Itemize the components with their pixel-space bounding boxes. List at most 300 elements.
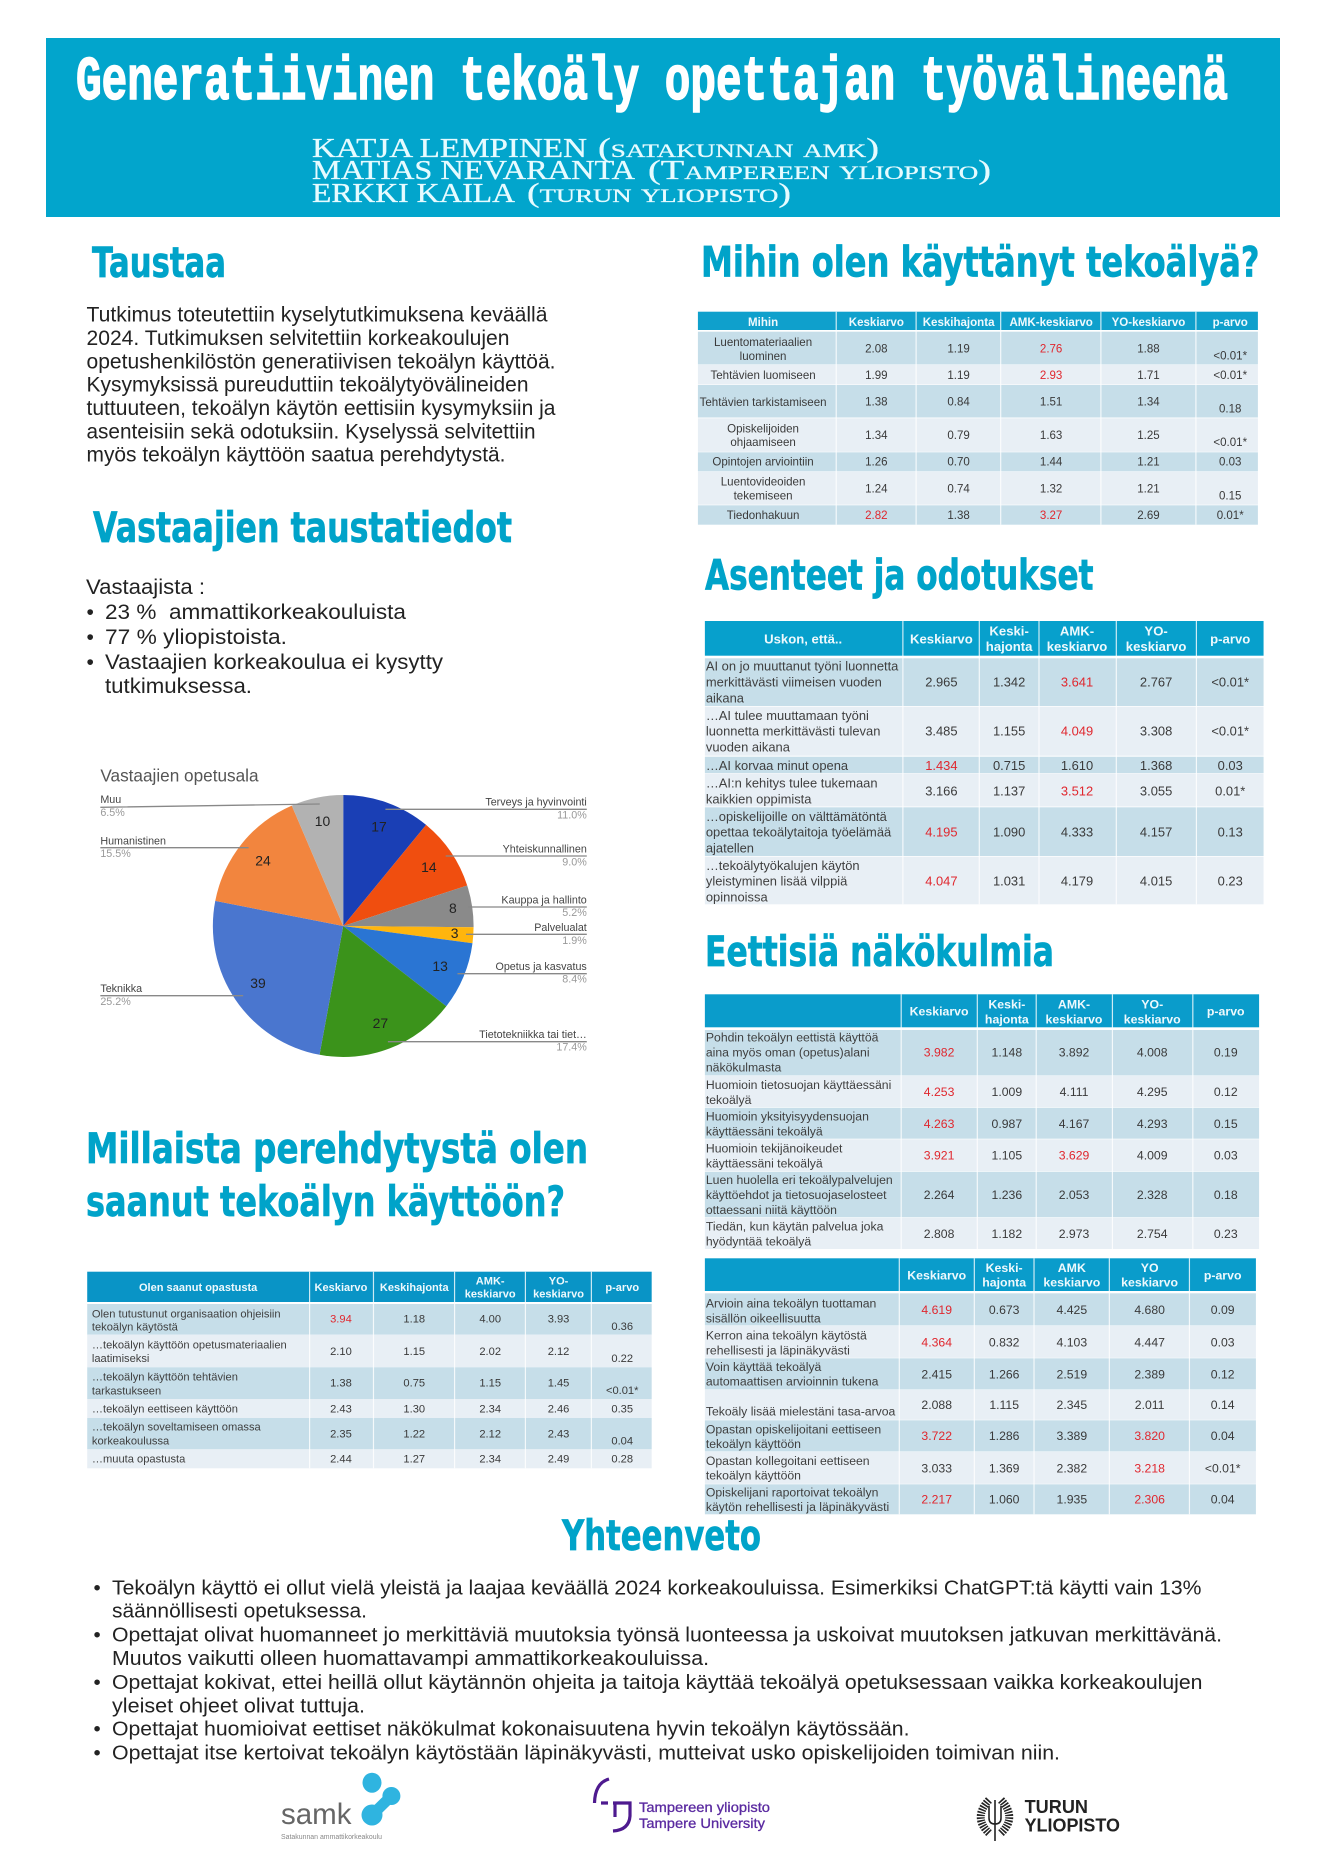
row 5: …tekoälyn soveltamiseen omassa: [92, 1422, 262, 1434]
row 3: 4.167: [1059, 1117, 1089, 1131]
row 3: 0.987: [992, 1117, 1022, 1131]
row 4: 2.011: [1135, 1398, 1165, 1412]
table header: [87, 1272, 652, 1302]
row 6: Tiedän, kun käytän palvelua joka: [706, 1220, 884, 1234]
row 6: Luentovideoiden: [721, 477, 805, 489]
table header: Mihin: [748, 317, 778, 329]
row 5: ajatellen: [706, 840, 754, 855]
table header: Keskiarvo: [315, 1282, 368, 1294]
row 4: …tekoälyn eettiseen käyttöön: [92, 1403, 238, 1415]
row 1: 2.767: [1140, 675, 1172, 690]
table header: keskiarvo: [1126, 639, 1186, 654]
slice labels and leader lines: 5.2%: [562, 907, 587, 919]
text block: respondents: Vastaajien korkeakoulua ei kysytty: [105, 651, 444, 674]
text block: summary bullets: Opettajat huomioivat eettiset näkökulmat kokonaisuutena hyvin tekoälyn käytössään.: [112, 1718, 910, 1741]
row 3: 0.03: [1218, 758, 1243, 773]
text block: Taustaa: 2024. Tutkimuksen selvitettiin korkeakoulujen: [86, 327, 510, 350]
row 7: [698, 505, 1258, 525]
table header: p-arvo: [1207, 1005, 1245, 1019]
row 2: 1.19: [947, 370, 970, 382]
row 4: 2.46: [548, 1403, 569, 1415]
row 5: 0.03: [1219, 457, 1241, 469]
row 4: 1.34: [865, 430, 888, 442]
row 1: aina myös oman (opetus)alani: [706, 1046, 870, 1060]
row 2: laatimiseksi: [92, 1353, 149, 1365]
row 1: Luentomateriaalien: [714, 337, 812, 349]
row 5: 3.820: [1134, 1429, 1165, 1443]
row 3: 1.45: [548, 1378, 569, 1390]
row 2: Huomioin tietosuojan käyttäessäni: [706, 1078, 891, 1092]
row 5: 0.04: [1211, 1429, 1235, 1443]
row 6: [705, 1452, 1256, 1484]
table header: [698, 312, 1258, 330]
row 6: yleistyminen lisää vilppiä: [706, 874, 848, 889]
text block: Taustaa: Kysymyksissä pureuduttiin tekoälytyövälineiden: [86, 374, 528, 397]
row 5: 4.195: [925, 825, 958, 840]
row 6: Opastan kollegoitani eettiseen: [706, 1454, 870, 1468]
row 4: 1.105: [992, 1149, 1022, 1163]
text block: Taustaa: opetushenkilöstön generatiivisen tekoälyn käyttöä.: [86, 350, 556, 373]
row 1: 0.673: [989, 1303, 1020, 1317]
row 6: 0.74: [947, 483, 970, 495]
table header: AMK-: [1058, 997, 1090, 1011]
logo: Turun yliopisto: YLIOPISTO: [1025, 1815, 1120, 1836]
row 1: 4.008: [1137, 1046, 1168, 1060]
row 1: Olen tutustunut organisaation ohjeisiin: [92, 1308, 281, 1320]
table header: YO-: [549, 1275, 569, 1287]
row 2: [705, 707, 1264, 756]
row 1: 2.08: [865, 343, 888, 356]
text block: Taustaa: [86, 304, 556, 467]
row 3: 2.389: [1134, 1367, 1165, 1381]
slice labels and leader lines: 15.5%: [100, 848, 131, 860]
row 4: Opiskelijoiden: [727, 423, 799, 435]
row 2: 0.22: [611, 1353, 633, 1365]
row 1: 1.148: [992, 1046, 1022, 1060]
row 4: [705, 1390, 1256, 1420]
pie chart: Vastaajien opetusala: [100, 766, 587, 1057]
row 3: 1.15: [479, 1378, 501, 1390]
row 7: 0.01*: [1217, 510, 1244, 522]
row 5: 1.090: [993, 825, 1025, 840]
row 2: 3.308: [1140, 724, 1172, 739]
row 5: 4.157: [1140, 825, 1172, 840]
table header: keskiarvo: [1124, 1012, 1181, 1026]
row 1: <0.01*: [1213, 350, 1248, 362]
row 5: korkeakoulussa: [92, 1436, 170, 1448]
text block: Taustaa: asenteisiin sekä odotuksiin. Kyselyssä selvitettiin: [86, 420, 536, 443]
slice values: 39: [250, 975, 266, 991]
row 3: 1.38: [330, 1378, 352, 1390]
slice values: 27: [373, 1015, 388, 1031]
row 5: Opastan opiskelijoitani eettiseen: [706, 1422, 881, 1436]
row 3: [87, 1367, 652, 1399]
row 7: Tiedonhakuun: [727, 510, 799, 522]
table header: p-arvo: [1210, 631, 1250, 646]
row 5: 1.236: [992, 1188, 1022, 1202]
row 1: 0.19: [1214, 1046, 1238, 1060]
text block: summary bullets: •: [94, 1671, 101, 1694]
table header: hajonta: [986, 639, 1033, 654]
row 2: 2.02: [479, 1346, 501, 1358]
row 4: 0.79: [947, 430, 970, 442]
row 2: 3.485: [925, 724, 958, 739]
row 4: kaikkien oppimista: [706, 791, 812, 806]
row 2: [698, 365, 1258, 384]
row 4: ohjaamiseen: [730, 437, 796, 449]
row 7: 0.04: [1211, 1493, 1235, 1507]
row 3: 4.293: [1137, 1117, 1168, 1131]
row 5: 0.18: [1214, 1188, 1238, 1202]
row 3: [705, 757, 1264, 773]
row 4: 1.30: [403, 1403, 425, 1415]
row 2: Kerron aina tekoälyn käytöstä: [706, 1328, 867, 1342]
row 1: [705, 1030, 1259, 1076]
row 2: 4.447: [1134, 1336, 1165, 1350]
table header: keskiarvo: [465, 1289, 516, 1301]
row 2: luonnetta merkittävästi tulevan: [706, 724, 880, 739]
row 1: Arvioin aina tekoälyn tuottaman: [706, 1296, 877, 1310]
row 5: 4.333: [1061, 825, 1093, 840]
row 4: …AI:n kehitys tulee tukemaan: [706, 776, 878, 791]
table header: YO: [1141, 1261, 1159, 1275]
row 6: [705, 1218, 1259, 1249]
row 1: 4.680: [1134, 1303, 1165, 1317]
row 2: 0.12: [1214, 1085, 1238, 1099]
table: Mihin: [698, 312, 1258, 525]
row 2: rehellisesti ja läpinäkyvästi: [706, 1343, 850, 1357]
row 7: käytön rehellisesti ja läpinäkyvästi: [706, 1500, 889, 1514]
text block: Taustaa: Tutkimus toteutettiin kyselytutkimuksena keväällä: [86, 304, 548, 327]
row 3: 1.38: [865, 397, 888, 409]
row 5: 1.286: [989, 1429, 1020, 1443]
slice labels and leader lines: 11.0%: [557, 810, 587, 822]
pie slices: [213, 795, 474, 1057]
row 1: <0.01*: [1211, 675, 1249, 690]
slice labels and leader lines: Terveys ja hyvinvointi: [485, 797, 587, 809]
row 6: 1.27: [403, 1454, 425, 1466]
text block: summary bullets: Opettajat itse kertoivat tekoälyn käytöstään läpinäkyvästi, mutteivat usko opiskelijoiden toimivan niin.: [112, 1741, 1060, 1764]
row 6: 1.031: [993, 874, 1025, 889]
row 3: 2.519: [1057, 1367, 1087, 1381]
row 1: 3.641: [1061, 675, 1093, 690]
row 4: 1.25: [1137, 430, 1160, 442]
row 3: [698, 385, 1258, 418]
row 7: 2.217: [921, 1493, 952, 1507]
row 5: 2.12: [479, 1429, 501, 1441]
table header: keskiarvo: [1047, 639, 1107, 654]
row 4: [705, 773, 1264, 806]
row 3: 0.15: [1214, 1117, 1238, 1131]
slice labels and leader lines: 1.9%: [562, 935, 587, 947]
slice labels and leader lines: Teknikka: [100, 983, 142, 995]
table header: Keskiarvo: [910, 631, 973, 646]
row 2: 0.03: [1211, 1336, 1235, 1350]
row 4: 3.629: [1059, 1149, 1089, 1163]
row 1: 4.425: [1057, 1303, 1087, 1317]
slice labels and leader lines: Muu: [100, 794, 121, 806]
table header: AMK-: [1060, 623, 1094, 638]
text block: summary bullets: säännöllisesti opetuksessa.: [112, 1600, 367, 1623]
row 4: 2.43: [330, 1403, 352, 1415]
row 2: [87, 1335, 652, 1367]
logo: samk: [281, 1773, 400, 1841]
text block: Taustaa: myös tekoälyn käyttöön saatua perehdytystä.: [86, 444, 506, 467]
authors: KATJA LEMPINEN: [312, 133, 587, 163]
row 6: 2.754: [1137, 1227, 1168, 1241]
row 4: 4.009: [1137, 1149, 1168, 1163]
row 5: ottaessani niitä käyttöön: [706, 1203, 837, 1217]
row 3: Tehtävien tarkistamiseen: [700, 397, 827, 409]
row 2: 4.253: [924, 1085, 955, 1099]
row 6: 0.28: [611, 1454, 633, 1466]
chart title: Vastaajien opetusala: [100, 766, 259, 786]
row 2: Tehtävien luomiseen: [711, 370, 816, 382]
row 5: 1.22: [403, 1429, 425, 1441]
row 2: 4.103: [1057, 1336, 1087, 1350]
table header: [705, 621, 1264, 656]
slice values: 17: [371, 819, 387, 835]
table header: keskiarvo: [1043, 1276, 1101, 1290]
row 6: 1.32: [1040, 483, 1062, 495]
table: ethics A: [705, 994, 1259, 1249]
row 2: 4.111: [1060, 1085, 1089, 1099]
row 2: vuoden aikana: [706, 739, 791, 754]
row 2: 0.832: [989, 1336, 1020, 1350]
row 5: 2.35: [330, 1429, 352, 1441]
row 6: 2.49: [548, 1454, 569, 1466]
row 5: 1.21: [1137, 457, 1160, 469]
row 7: 1.38: [947, 510, 970, 522]
row 3: <0.01*: [606, 1385, 639, 1397]
row 6: 3.218: [1134, 1461, 1165, 1475]
text block: summary bullets: Tekoälyn käyttö ei ollut vielä yleistä ja laajaa keväällä 2024 korkeakouluissa. Esimerkiksi ChatGPT:tä käytti vain 13%: [112, 1576, 1202, 1599]
text block: summary bullets: Opettajat kokivat, ettei heillä ollut käytännön ohjeita ja taitoja käyttää tekoälyä opetuksessaan vaikka korkeakoulujen: [112, 1671, 1203, 1694]
table header: Keskihajonta: [380, 1282, 449, 1294]
row 4: 0.01*: [1215, 783, 1245, 798]
heading: Asenteet ja odotukset: Asenteet ja odotukset: [705, 550, 1094, 599]
row 5: tekoälyn käyttöön: [706, 1437, 801, 1451]
row 6: [705, 857, 1264, 904]
table header: keskiarvo: [1046, 1012, 1103, 1026]
row 6: 1.182: [992, 1227, 1022, 1241]
row 1: 3.94: [330, 1314, 352, 1326]
row 5: Opintojen arviointiin: [712, 457, 814, 469]
row 4: käyttäessäni tekoälyä: [706, 1156, 823, 1170]
text block: respondents: [86, 576, 444, 698]
text block: respondents: 23 % ammattikorkeakouluista: [105, 601, 406, 624]
row 1: sisällön oikeellisuutta: [706, 1311, 821, 1325]
table header: p-arvo: [605, 1282, 639, 1294]
row 4: [698, 418, 1258, 452]
table header: Keskihajonta: [923, 317, 995, 329]
row 5: käyttöehdot ja tietosuojaselosteet: [706, 1188, 887, 1202]
row 5: 2.264: [924, 1188, 955, 1202]
logo: Tampere University: [594, 1779, 770, 1831]
slice values: 13: [432, 958, 448, 974]
row 2: 4.295: [1137, 1085, 1168, 1099]
text block: summary bullets: •: [94, 1624, 101, 1647]
text block: respondents: Vastaajista :: [86, 576, 205, 599]
table: ethics B: [705, 1258, 1256, 1514]
row 5: Luen huolella eri tekoälypalvelujen: [706, 1173, 893, 1187]
row 6: 4.015: [1140, 874, 1172, 889]
row 1: näkökulmasta: [706, 1061, 781, 1075]
text block: summary bullets: Muutos vaikutti olleen huomattavampi ammattikorkeakouluissa.: [112, 1647, 709, 1670]
row 2: <0.01*: [1211, 724, 1249, 739]
row 2: …tekoälyn käyttöön opetusmateriaalien: [92, 1339, 287, 1351]
text block: respondents: •: [86, 651, 94, 674]
text block: respondents: •: [86, 601, 94, 624]
heading: Eettisiä näkökulmia: Eettisiä näkökulmia: [705, 927, 1054, 976]
row 3: käyttäessäni tekoälyä: [706, 1125, 823, 1139]
row 4: 1.137: [993, 783, 1025, 798]
row 5: …opiskelijoille on välttämätöntä: [706, 809, 888, 824]
row 5: 1.44: [1040, 457, 1063, 469]
row 1: 3.892: [1059, 1046, 1089, 1060]
text block: summary bullets: •: [94, 1576, 101, 1599]
row 3: 1.34: [1137, 397, 1160, 409]
row 7: 2.306: [1134, 1493, 1165, 1507]
row 3: 0.715: [993, 758, 1025, 773]
text block: summary bullets: Opettajat olivat huomanneet jo merkittäviä muutoksia työnsä luonteessa ja uskoivat muutoksen jatkuvan merkittävänä.: [112, 1624, 1222, 1647]
slice labels and leader lines: Yhteiskunnallinen: [503, 843, 587, 855]
row 2: 1.15: [403, 1346, 425, 1358]
table header: YO-: [1141, 997, 1163, 1011]
row 2: 4.049: [1061, 724, 1093, 739]
table header: Keski-: [989, 623, 1029, 638]
row 3: 0.12: [1211, 1367, 1235, 1381]
row 6: [87, 1449, 652, 1468]
row 6: 1.24: [865, 483, 888, 495]
slice labels and leader lines: 17.4%: [556, 1042, 587, 1054]
row 5: 1.26: [865, 457, 888, 469]
row 3: 0.84: [947, 397, 970, 409]
row 4: Tekoäly lisää mielestäni tasa-arvoa: [706, 1405, 896, 1419]
heading: Yhteenveto: Yhteenveto: [561, 1511, 761, 1560]
row 1: luominen: [740, 351, 786, 363]
table header: Keskiarvo: [907, 1268, 967, 1282]
row 1: 0.36: [611, 1321, 633, 1333]
row 3: [705, 1108, 1259, 1139]
row 4: 1.115: [989, 1398, 1019, 1412]
row 3: [705, 1358, 1256, 1390]
row 6: 0.23: [1218, 874, 1243, 889]
authors: (Tampereen yliopisto): [648, 155, 991, 185]
row 2: 2.10: [330, 1346, 352, 1358]
row 5: 2.328: [1137, 1188, 1168, 1202]
row 2: 1.99: [865, 370, 888, 382]
row 1: 3.93: [548, 1314, 569, 1326]
row 6: 2.808: [924, 1227, 955, 1241]
table header: AMK-: [476, 1275, 505, 1287]
row 3: …tekoälyn käyttöön tehtävien: [92, 1371, 238, 1383]
slice values: [250, 813, 459, 1031]
row 4: 1.63: [1040, 430, 1062, 442]
row 4: 2.345: [1057, 1398, 1087, 1412]
row 2: 1.009: [992, 1085, 1022, 1099]
row 3: 1.266: [989, 1367, 1020, 1381]
row 4: [87, 1399, 652, 1418]
row 2: tekoälyä: [706, 1093, 752, 1107]
row 6: 2.44: [330, 1454, 352, 1466]
slice values: 14: [421, 859, 437, 875]
text block: summary bullets: [94, 1576, 1222, 1764]
row 4: Huomioin tekijänoikeudet: [706, 1141, 843, 1155]
table header: YO-keskiarvo: [1112, 317, 1185, 329]
row 1: AI on jo muuttanut työni luonnetta: [706, 659, 899, 674]
slice labels and leader lines: Palvelualat: [534, 922, 587, 934]
row 5: [698, 452, 1258, 471]
row 5: opettaa tekoälytaitoja työelämää: [706, 825, 892, 840]
row 5: 2.053: [1059, 1188, 1089, 1202]
row 4: 3.055: [1140, 783, 1172, 798]
slice labels and leader lines: 6.5%: [100, 807, 125, 819]
row 2: [705, 1326, 1256, 1358]
row 5: 3.722: [921, 1429, 952, 1443]
heading: Vastaajien taustatiedot: Vastaajien taustatiedot: [93, 503, 512, 552]
row 1: Pohdin tekoälyn eettistä käyttöä: [706, 1031, 879, 1045]
row 1: [698, 332, 1258, 364]
text block: summary bullets: yleiset ohjeet olivat tuttuja.: [112, 1694, 365, 1717]
row 4: 3.166: [925, 783, 958, 798]
logo: Turun yliopisto: [981, 1796, 1120, 1841]
row 1: 3.982: [924, 1046, 955, 1060]
text block: respondents: •: [86, 626, 94, 649]
row 6: 2.34: [479, 1454, 501, 1466]
row 7: 2.82: [865, 510, 888, 522]
row 2: 1.155: [993, 724, 1025, 739]
row 5: 3.389: [1057, 1429, 1087, 1443]
row 1: [87, 1304, 652, 1335]
row 6: 4.179: [1061, 874, 1093, 889]
row 1: 2.76: [1040, 343, 1062, 356]
table header: AMK: [1058, 1261, 1086, 1275]
table: Uskon, että: [705, 621, 1264, 904]
row 4: 0.35: [611, 1403, 633, 1415]
text block: summary bullets: •: [94, 1718, 101, 1741]
row 7: 3.27: [1040, 510, 1062, 522]
row 5: 0.13: [1218, 825, 1243, 840]
table header: [705, 994, 1259, 1027]
heading: Taustaa: Taustaa: [92, 238, 226, 287]
header banner: [46, 38, 1280, 217]
row 2: 2.12: [548, 1346, 569, 1358]
row 1: 1.19: [947, 343, 970, 356]
row 1: merkittävästi viimeisen vuoden: [706, 675, 882, 690]
row 4: 0.14: [1211, 1398, 1235, 1412]
row 4: 0.03: [1214, 1149, 1238, 1163]
row 5: [705, 1420, 1256, 1452]
text block: summary bullets: •: [94, 1741, 101, 1764]
row 5: [705, 1172, 1259, 1217]
table header: Keski-: [988, 997, 1025, 1011]
row 5: [87, 1418, 652, 1449]
row 2: [705, 1076, 1259, 1107]
text block: respondents: tutkimuksessa.: [105, 675, 252, 698]
row 2: …AI tulee muuttamaan työni: [706, 708, 869, 723]
table header: Uskon, että..: [764, 631, 842, 646]
row 5: 0.04: [611, 1436, 633, 1448]
authors: (turun yliopisto): [527, 178, 791, 208]
slice labels and leader lines: [100, 794, 587, 1054]
row 6: …muuta opastusta: [92, 1454, 186, 1466]
heading: Millaista perehdytystä: [86, 1124, 588, 1226]
row 1: 0.09: [1211, 1303, 1235, 1317]
table header: keskiarvo: [533, 1289, 584, 1301]
row 4: 2.34: [479, 1403, 501, 1415]
row 6: 2.973: [1059, 1227, 1089, 1241]
